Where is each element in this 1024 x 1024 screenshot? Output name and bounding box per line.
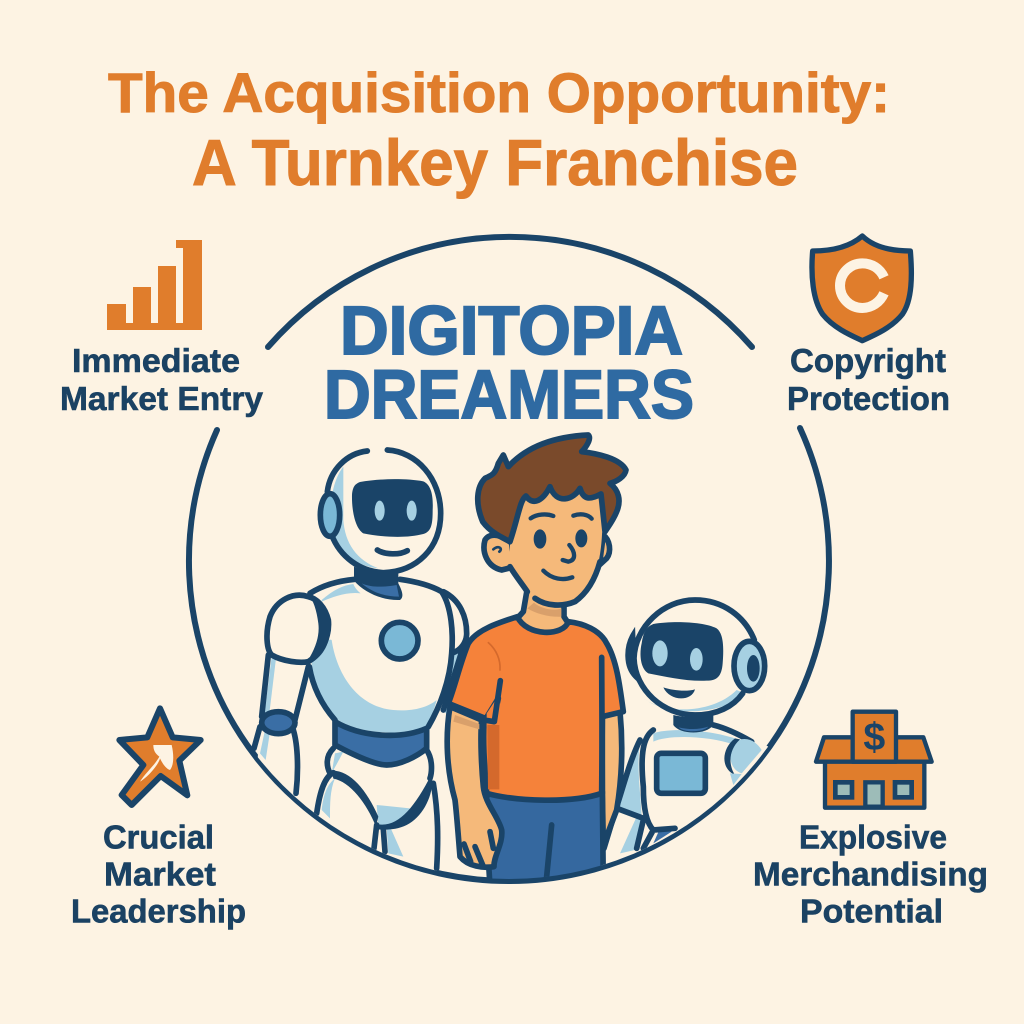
title: The Acquisition Opportunity:	[108, 61, 890, 124]
small robot screen	[657, 753, 705, 793]
legs	[317, 748, 438, 868]
tall robot	[250, 450, 467, 887]
small robot visor	[640, 622, 723, 681]
label: Explosive Merchandising Potential: Merchandising	[753, 856, 988, 892]
boy face	[510, 487, 602, 605]
label: Explosive Merchandising Potential: Potential	[800, 892, 943, 930]
circle frame	[189, 237, 829, 881]
small robot	[600, 600, 768, 870]
label: Crucial Market Leadership	[71, 818, 246, 930]
robot shading	[260, 584, 463, 857]
small robot head	[627, 600, 765, 715]
label: Crucial Market Leadership: Crucial	[103, 818, 214, 856]
label: Crucial Market Leadership: Leadership	[71, 892, 246, 930]
boy ears	[484, 535, 515, 570]
boy neck	[518, 592, 569, 630]
icon: star with arrow	[119, 708, 201, 805]
robot neck	[354, 567, 402, 600]
label: Explosive Merchandising Potential: Explosive	[799, 818, 947, 856]
shoulder	[267, 595, 329, 662]
label: Immediate Market Entry	[60, 342, 264, 417]
label: Immediate Market Entry: Immediate	[72, 342, 240, 379]
robot visor	[352, 479, 433, 537]
label: Copyright Protection: Copyright	[790, 342, 946, 379]
arm	[254, 655, 308, 793]
label: Copyright Protection: Protection	[787, 380, 950, 417]
boy shirt	[448, 617, 623, 800]
brand name: Digitopia Dreamers	[324, 292, 694, 433]
chest light	[381, 622, 418, 659]
waist belt	[335, 722, 427, 765]
robot head	[320, 450, 441, 573]
label: Immediate Market Entry: Market Entry	[60, 380, 264, 417]
title	[108, 61, 890, 199]
icon: copyright shield	[812, 236, 911, 341]
boy hair	[478, 435, 626, 542]
label: Explosive Merchandising Potential	[753, 818, 988, 930]
title: A Turnkey Franchise	[192, 126, 798, 199]
label: Crucial Market Leadership: Market	[104, 856, 216, 892]
small robot body	[602, 746, 768, 866]
icon: bar chart	[107, 240, 202, 330]
brand name: Digitopia Dreamers: DIGITOPIA	[340, 292, 683, 369]
robot torso outline	[309, 579, 452, 727]
characters group	[250, 435, 768, 887]
robot body fills	[258, 754, 437, 871]
boy	[447, 435, 626, 887]
boy eyes and brows	[534, 529, 546, 549]
boy pants	[485, 792, 603, 887]
label: Copyright Protection	[787, 342, 950, 417]
icon: store with dollar sign: $	[863, 715, 885, 759]
brand name: Digitopia Dreamers: DREAMERS	[324, 356, 694, 433]
boy left arm	[447, 707, 502, 867]
icon: store with dollar sign	[816, 712, 932, 808]
small robot shoulder	[730, 739, 762, 773]
boy right arm	[602, 712, 622, 845]
small robot ear	[734, 641, 765, 691]
small robot neck	[673, 713, 713, 732]
